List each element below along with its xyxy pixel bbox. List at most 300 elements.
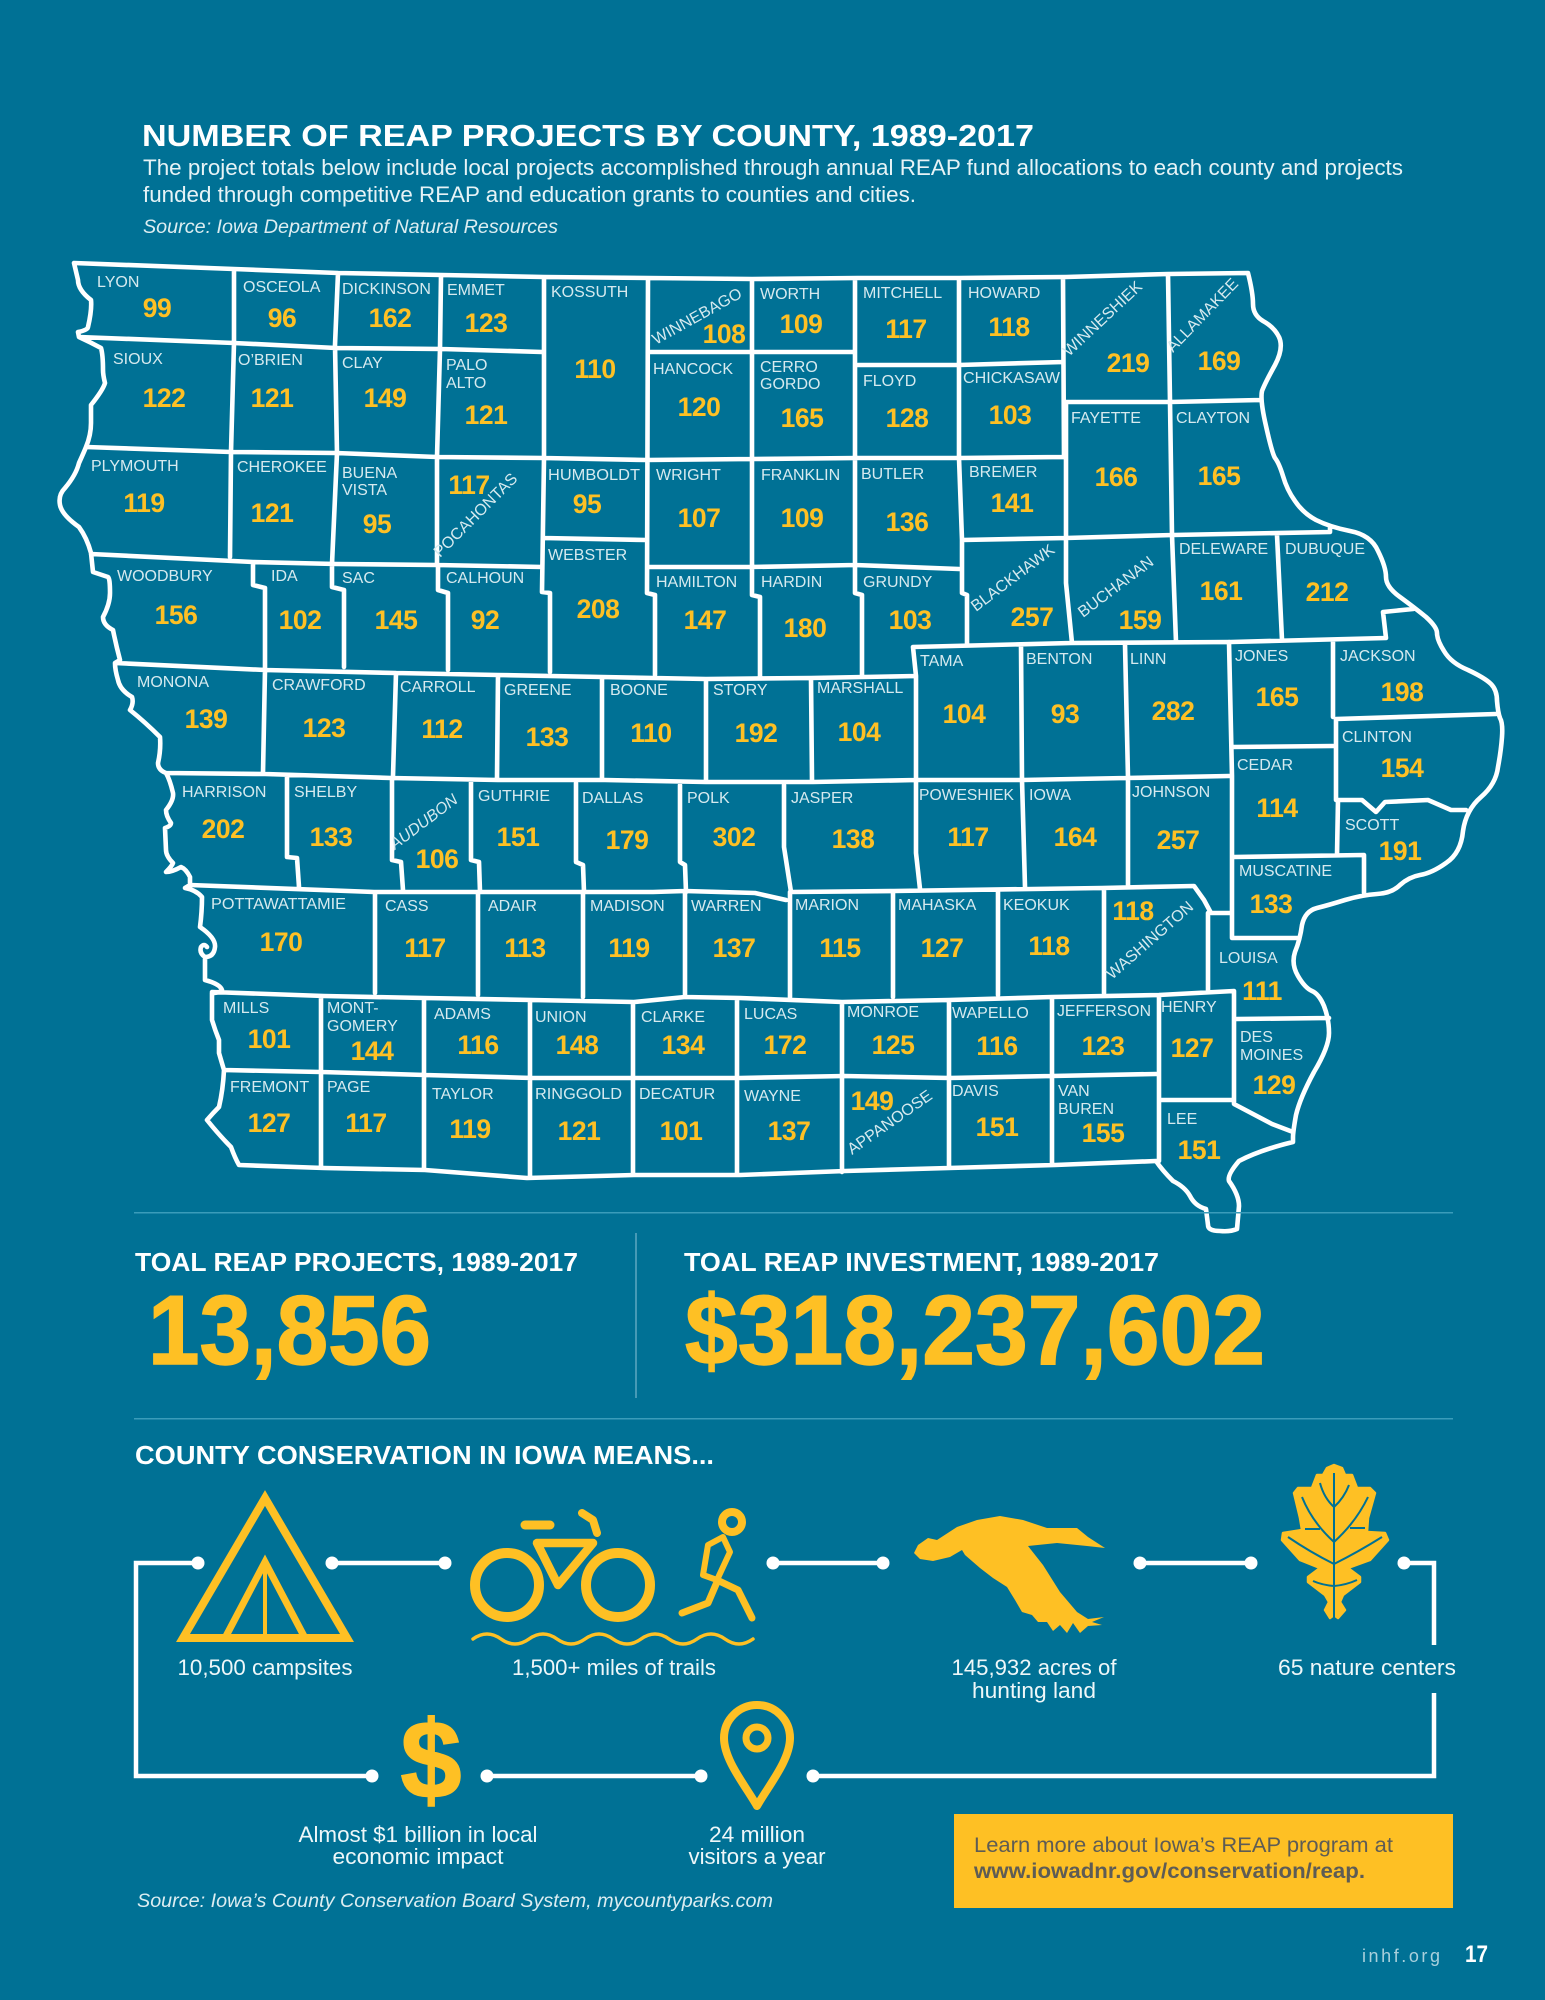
county: Chickasaw — [963, 370, 1061, 430]
county: Boone: 110 — [630, 718, 672, 748]
county: Clarke: CLARKE — [641, 1009, 705, 1026]
county: Buchanan: BUCHANAN — [1075, 554, 1157, 621]
county: Jefferson: JEFFERSON — [1057, 1003, 1151, 1020]
county: Osceola: OSCEOLA — [243, 279, 321, 296]
county: Palo Alto — [446, 357, 507, 430]
county: Shelby: SHELBY — [294, 784, 357, 801]
county: Cedar: 114 — [1256, 793, 1298, 823]
county: Tama — [920, 653, 986, 729]
county: Adair: 113 — [504, 933, 546, 963]
county: Taylor: 119 — [449, 1114, 491, 1144]
county: Cass: 117 — [404, 933, 446, 963]
county: Muscatine: 133 — [1250, 889, 1292, 919]
county: Muscatine: MUSCATINE — [1239, 863, 1332, 880]
county: Marshall: MARSHALL — [817, 680, 903, 697]
county: Union: 148 — [556, 1030, 598, 1060]
county: Decatur: 101 — [660, 1116, 702, 1146]
county: Cherokee: CHEROKEE — [237, 459, 327, 476]
county: Winneshiek: 219 — [1107, 348, 1149, 378]
stat: total projects: TOAL REAP PROJECTS, 1989-2017 — [135, 1247, 578, 1277]
county: Keokuk: 118 — [1028, 931, 1070, 961]
county: Fremont: 127 — [248, 1108, 290, 1138]
county: Van Buren: 155 — [1082, 1118, 1124, 1148]
county: Woodbury — [117, 568, 213, 630]
county: Jones: 165 — [1256, 682, 1298, 712]
county: Emmet — [447, 282, 507, 338]
county: Polk: POLK — [687, 790, 730, 807]
county: Butler: 136 — [886, 507, 928, 537]
county: Montgomery: GOMERY — [327, 1018, 398, 1035]
footer: site and page number — [1362, 1941, 1488, 1968]
icon: oak leaf — [1282, 1465, 1388, 1618]
county: Winneshiek: WINNESHIEK — [1060, 278, 1146, 360]
county: Hancock: HANCOCK — [653, 361, 733, 378]
county: Washington: 118 — [1112, 896, 1154, 926]
county: Dubuque: 212 — [1306, 577, 1348, 607]
county: Fremont — [230, 1079, 309, 1138]
county: Cass: CASS — [385, 898, 429, 915]
county: Benton: BENTON — [1026, 651, 1092, 668]
economic impact label — [298, 1822, 538, 1869]
stat: total projects: 13,856 — [148, 1275, 431, 1385]
callout: learn more: Learn more about Iowa’s REAP program at — [974, 1834, 1393, 1857]
county: Plymouth — [91, 458, 179, 518]
county: Blackhawk: 257 — [1011, 602, 1053, 632]
map: Iowa counties — [60, 263, 1502, 1231]
county: Warren — [691, 898, 762, 963]
county: Madison — [590, 898, 665, 963]
nature centers label: 65 nature centers — [1278, 1655, 1456, 1680]
county: Webster: 208 — [577, 594, 619, 624]
county: Clay: 149 — [364, 383, 406, 413]
county: Calhoun: CALHOUN — [446, 570, 524, 587]
county: Kossuth: KOSSUTH — [551, 284, 628, 301]
county: Worth: WORTH — [760, 286, 820, 303]
campsites label: 10,500 campsites — [178, 1655, 352, 1680]
county: Lucas: 172 — [764, 1030, 806, 1060]
county: Louisa: LOUISA — [1219, 950, 1278, 967]
county: Hamilton: 147 — [684, 605, 726, 635]
county: Story — [713, 682, 777, 748]
visitors label: visitors a year — [688, 1844, 826, 1869]
county: Van Buren — [1058, 1083, 1124, 1148]
section heading: COUNTY CONSERVATION IN IOWA MEANS... — [135, 1440, 714, 1470]
visitors label — [688, 1822, 826, 1869]
county: Butler — [861, 466, 928, 537]
county: Cherokee: 121 — [251, 498, 293, 528]
county: Dallas — [582, 790, 648, 855]
county: Palo Alto: ALTO — [446, 375, 486, 392]
county: Keokuk — [1003, 897, 1070, 961]
connector lines — [136, 1556, 1434, 1782]
county: Buchanan: 159 — [1119, 605, 1161, 635]
county: Adams — [434, 1006, 499, 1060]
county: Linn — [1130, 651, 1194, 726]
county: Van Buren: VAN — [1058, 1083, 1090, 1100]
county: Page — [327, 1079, 387, 1138]
county: Decatur — [639, 1086, 715, 1146]
county: Chickasaw: CHICKASAW — [963, 370, 1061, 387]
county: Jefferson — [1057, 1003, 1151, 1061]
county: Davis — [952, 1083, 1018, 1142]
county: Dallas: 179 — [606, 825, 648, 855]
hunting land label — [952, 1655, 1117, 1703]
county: Ida: 102 — [279, 605, 321, 635]
stat: total investment: TOAL REAP INVESTMENT, 1989-2017 — [684, 1247, 1159, 1277]
county: O'Brien: 121 — [251, 383, 293, 413]
county: Cerro Gordo: 165 — [781, 403, 823, 433]
county: Keokuk: KEOKUK — [1003, 897, 1070, 914]
county: Ringgold: RINGGOLD — [535, 1086, 622, 1103]
county: Scott: 191 — [1379, 836, 1421, 866]
county: Guthrie: 151 — [497, 822, 539, 852]
county: Lyon: 99 — [143, 293, 171, 323]
county: Chickasaw: 103 — [989, 400, 1031, 430]
intro text — [143, 155, 1403, 207]
county: Plymouth: PLYMOUTH — [91, 458, 179, 475]
county: Hamilton — [656, 574, 737, 635]
hunting land label: hunting land — [972, 1678, 1096, 1703]
county: Winnebago: 108 — [703, 319, 745, 349]
county: Howard — [968, 285, 1040, 342]
county: Delaware: 161 — [1200, 576, 1242, 606]
county: Davis: DAVIS — [952, 1083, 999, 1100]
county: Mahaska — [898, 897, 977, 963]
county: Marshall: 104 — [838, 717, 881, 747]
county: Boone — [610, 682, 672, 748]
county: Emmet: 123 — [465, 308, 507, 338]
county: Lee — [1167, 1111, 1220, 1165]
county: Cerro Gordo: GORDO — [760, 376, 820, 393]
county: Buena Vista — [342, 465, 397, 539]
county: Lee: LEE — [1167, 1111, 1197, 1128]
county: Fayette: FAYETTE — [1071, 410, 1141, 427]
county: Johnson: JOHNSON — [1132, 784, 1210, 801]
county: Warren: WARREN — [691, 898, 762, 915]
stat: total projects — [135, 1247, 578, 1385]
county: Monona: MONONA — [137, 674, 209, 691]
county: Poweshiek: 117 — [947, 822, 989, 852]
county: Henry: HENRY — [1161, 999, 1217, 1016]
county: Jones: JONES — [1235, 648, 1288, 665]
county: Union: UNION — [535, 1009, 587, 1026]
county: Adams: ADAMS — [434, 1006, 491, 1023]
county: Harrison: HARRISON — [182, 784, 266, 801]
county: Clinton: 154 — [1381, 753, 1424, 783]
county: Delaware — [1179, 541, 1268, 606]
county: Harrison — [182, 784, 266, 844]
county: Henry — [1161, 999, 1217, 1063]
county: Louisa: 111 — [1242, 976, 1282, 1006]
county: Des Moines: MOINES — [1240, 1047, 1303, 1064]
county: Marion — [795, 897, 861, 963]
county: Clinton: CLINTON — [1342, 729, 1412, 746]
county: Clay: CLAY — [342, 355, 383, 372]
callout: learn more — [954, 1814, 1453, 1908]
county: Buena Vista: BUENA — [342, 465, 397, 482]
county: Grundy: GRUNDY — [863, 574, 933, 591]
county: Montgomery: MONT- — [327, 1000, 379, 1017]
county: Carroll: CARROLL — [400, 679, 476, 696]
county: Palo Alto: 121 — [465, 400, 507, 430]
county: Mitchell: MITCHELL — [863, 285, 942, 302]
county: Henry: 127 — [1171, 1033, 1213, 1063]
county: Adair — [488, 898, 546, 963]
county: Cass — [385, 898, 446, 963]
county: Scott: SCOTT — [1345, 817, 1399, 834]
county: Ida: IDA — [271, 568, 298, 585]
county: Crawford: CRAWFORD — [272, 677, 366, 694]
county: Scott — [1345, 817, 1421, 866]
county: Jackson: 198 — [1381, 677, 1423, 707]
county: Floyd: FLOYD — [863, 373, 916, 390]
intro text: The project totals below include local projects accomplished through annual REAP fund allocations to each county and projects — [143, 155, 1403, 180]
county: Poweshiek — [919, 787, 1014, 852]
county: Franklin: FRANKLIN — [761, 467, 840, 484]
county: Jasper: JASPER — [791, 790, 853, 807]
county: Buena Vista: 95 — [363, 509, 391, 539]
county: Cerro Gordo: CERRO — [760, 359, 818, 376]
county: Franklin: 109 — [781, 503, 823, 533]
county: Plymouth: 119 — [123, 488, 165, 518]
county: Allamakee: ALLAMAKEE — [1164, 276, 1242, 356]
county: Wayne: WAYNE — [744, 1088, 801, 1105]
county: Sac — [342, 570, 417, 635]
county: Webster — [548, 547, 627, 624]
county: Dickinson: 162 — [369, 303, 411, 333]
county: Fremont: FREMONT — [230, 1079, 309, 1096]
county: Davis: 151 — [976, 1112, 1018, 1142]
county: Humboldt: 95 — [573, 489, 601, 519]
county: Van Buren: BUREN — [1058, 1101, 1114, 1118]
county: Wayne: 137 — [768, 1116, 810, 1146]
county: Dubuque: DUBUQUE — [1285, 541, 1365, 558]
county: Clarke: 134 — [662, 1030, 705, 1060]
county: Pottawattamie — [211, 896, 346, 957]
county borders — [60, 263, 1502, 1231]
county: Lyon — [97, 274, 171, 323]
county: Monroe — [847, 1004, 919, 1060]
county: Story: STORY — [713, 682, 768, 699]
county: Story: 192 — [735, 718, 777, 748]
county: Calhoun — [446, 570, 524, 635]
county: Winnebago: WINNEBAGO — [650, 285, 745, 348]
county: Marshall — [817, 680, 903, 747]
county: Sac: 145 — [375, 605, 417, 635]
icon: dollar sign: $ — [400, 1699, 462, 1822]
county: Audubon: 106 — [416, 844, 458, 874]
county: Floyd: 128 — [886, 403, 928, 433]
county: Fayette — [1071, 410, 1141, 492]
county: Mahaska: MAHASKA — [898, 897, 977, 914]
county: Bremer: BREMER — [969, 464, 1037, 481]
county: Clarke — [641, 1009, 705, 1060]
county: Greene — [504, 682, 572, 752]
icon: flying duck — [914, 1516, 1105, 1633]
county: Montgomery — [327, 1000, 398, 1066]
county: Hancock: 120 — [678, 392, 720, 422]
county: Madison: 119 — [608, 933, 650, 963]
county: Jackson: JACKSON — [1340, 648, 1416, 665]
county: Linn: 282 — [1152, 696, 1194, 726]
hunting land label: 145,932 acres of — [952, 1655, 1117, 1680]
county: Warren: 137 — [713, 933, 755, 963]
county: Guthrie — [478, 788, 550, 852]
county: Ringgold — [535, 1086, 622, 1146]
county: Hamilton: HAMILTON — [656, 574, 737, 591]
county: Sioux: SIOUX — [113, 351, 163, 368]
county: Taylor: TAYLOR — [432, 1086, 494, 1103]
conservation source: Source: Iowa’s County Conservation Board System, mycountyparks.com — [137, 1891, 773, 1912]
county: Taylor — [432, 1086, 494, 1144]
county: Palo Alto: PALO — [446, 357, 488, 374]
county: Allamakee: 169 — [1198, 346, 1240, 376]
county: Lyon: LYON — [97, 274, 139, 291]
county: Page: PAGE — [327, 1079, 370, 1096]
county: Dallas: DALLAS — [582, 790, 643, 807]
county: Jackson — [1340, 648, 1423, 707]
county: Crawford — [272, 677, 366, 743]
county: Woodbury: WOODBURY — [117, 568, 213, 585]
county: Lucas: LUCAS — [744, 1006, 797, 1023]
county: Cerro Gordo — [760, 359, 823, 433]
county: Cedar: CEDAR — [1237, 757, 1293, 774]
county: Howard: 118 — [988, 312, 1030, 342]
county: Des Moines — [1240, 1029, 1303, 1100]
county: Wright — [656, 467, 721, 533]
county: Adams: 116 — [457, 1030, 499, 1060]
stat: total investment: $318,237,602 — [685, 1275, 1265, 1385]
county: Ida — [271, 568, 321, 635]
county: Dubuque — [1285, 541, 1365, 607]
county: Hardin: 180 — [784, 613, 826, 643]
county: Jefferson: 123 — [1082, 1031, 1124, 1061]
county: Union — [535, 1009, 598, 1060]
county: Grundy — [863, 574, 933, 635]
county: Iowa: 164 — [1054, 822, 1097, 852]
county: Mitchell — [863, 285, 942, 344]
county: Boone: BOONE — [610, 682, 668, 699]
county: Shelby — [294, 784, 357, 852]
footer: site and page number: 17 — [1465, 1941, 1488, 1968]
county: Osceola — [243, 279, 321, 333]
county: Monroe: 125 — [872, 1030, 914, 1060]
county: Cherokee — [237, 459, 327, 528]
county: Polk — [687, 790, 755, 852]
county: Washington: WASHINGTON — [1103, 898, 1197, 983]
county: Cedar — [1237, 757, 1298, 823]
county: Bremer — [969, 464, 1037, 518]
county: Webster: WEBSTER — [548, 547, 627, 564]
county: Delaware: DELEWARE — [1179, 541, 1268, 558]
county: Worth — [760, 286, 822, 339]
county: Lucas — [744, 1006, 806, 1060]
county: Mahaska: 127 — [921, 933, 963, 963]
county: Des Moines: 129 — [1253, 1070, 1295, 1100]
county: Adair: ADAIR — [488, 898, 537, 915]
visitors label: 24 million — [709, 1822, 805, 1847]
county: Fayette: 166 — [1095, 462, 1137, 492]
county: Pottawattamie: POTTAWATTAMIE — [211, 896, 346, 913]
county: Kossuth: 110 — [574, 354, 616, 384]
county: Wapello — [952, 1005, 1029, 1061]
county: Guthrie: GUTHRIE — [478, 788, 550, 805]
county: Jasper — [791, 790, 874, 854]
county: Pottawattamie: 170 — [260, 927, 302, 957]
county: Mitchell: 117 — [885, 314, 927, 344]
county: Marion: 115 — [819, 933, 861, 963]
county: Bremer: 141 — [991, 488, 1033, 518]
county: Tama: TAMA — [920, 653, 964, 670]
economic impact label: economic impact — [332, 1844, 504, 1869]
county: Clay — [342, 355, 406, 413]
county: Grundy: 103 — [889, 605, 931, 635]
county: Decatur: DECATUR — [639, 1086, 715, 1103]
icon: map pin — [724, 1705, 790, 1806]
county: Mills — [223, 1000, 290, 1054]
county: Mills: 101 — [248, 1024, 290, 1054]
county: Clayton — [1176, 410, 1250, 491]
county: Audubon: AUDUBON — [386, 791, 462, 854]
county: Woodbury: 156 — [155, 600, 197, 630]
county: Worth: 109 — [780, 309, 822, 339]
county: Clinton — [1342, 729, 1424, 783]
county: Hardin: HARDIN — [761, 574, 822, 591]
county: Harrison: 202 — [202, 814, 244, 844]
county: Greene: GREENE — [504, 682, 572, 699]
county: Sac: SAC — [342, 570, 375, 587]
county: Madison: MADISON — [590, 898, 665, 915]
county: Shelby: 133 — [310, 822, 352, 852]
county: Dickinson: DICKINSON — [342, 281, 431, 298]
county: Johnson — [1132, 784, 1210, 855]
county: Pocahontas: 117 — [448, 470, 490, 500]
county: Appanoose: APPANOOSE — [845, 1087, 936, 1158]
county: Wapello: WAPELLO — [952, 1005, 1029, 1022]
county: Greene: 133 — [526, 722, 568, 752]
county: Sioux: 122 — [143, 383, 185, 413]
county: Calhoun: 92 — [471, 605, 499, 635]
county: Butler: BUTLER — [861, 466, 924, 483]
icon: tent — [183, 1498, 347, 1638]
county: Wayne — [744, 1088, 810, 1146]
county: Des Moines: DES — [1240, 1029, 1273, 1046]
county: Monroe: MONROE — [847, 1004, 919, 1021]
county: Clayton: CLAYTON — [1176, 410, 1250, 427]
county: Humboldt — [548, 467, 640, 519]
county: Crawford: 123 — [303, 713, 345, 743]
county: Osceola: 96 — [268, 303, 296, 333]
county: Benton: 93 — [1051, 699, 1079, 729]
county: Muscatine — [1239, 863, 1332, 919]
county: Emmet: EMMET — [447, 282, 505, 299]
county: Ringgold: 121 — [558, 1116, 600, 1146]
county: Floyd — [863, 373, 928, 433]
county: Tama: 104 — [943, 699, 986, 729]
county: O'Brien: O’BRIEN — [238, 352, 303, 369]
county: Iowa: IOWA — [1029, 787, 1071, 804]
county: Johnson: 257 — [1157, 825, 1199, 855]
county: Sioux — [113, 351, 185, 413]
title: NUMBER OF REAP PROJECTS BY COUNTY, 1989-2017 — [142, 118, 1034, 153]
county: Linn: LINN — [1130, 651, 1166, 668]
county: Poweshiek: POWESHIEK — [919, 787, 1014, 804]
trails label: 1,500+ miles of trails — [512, 1655, 716, 1680]
county: Wright: 107 — [678, 503, 720, 533]
county: Hancock — [653, 361, 733, 422]
map source: Source: Iowa Department of Natural Resources — [143, 217, 559, 238]
intro text: funded through competitive REAP and education grants to counties and cities. — [143, 182, 916, 207]
